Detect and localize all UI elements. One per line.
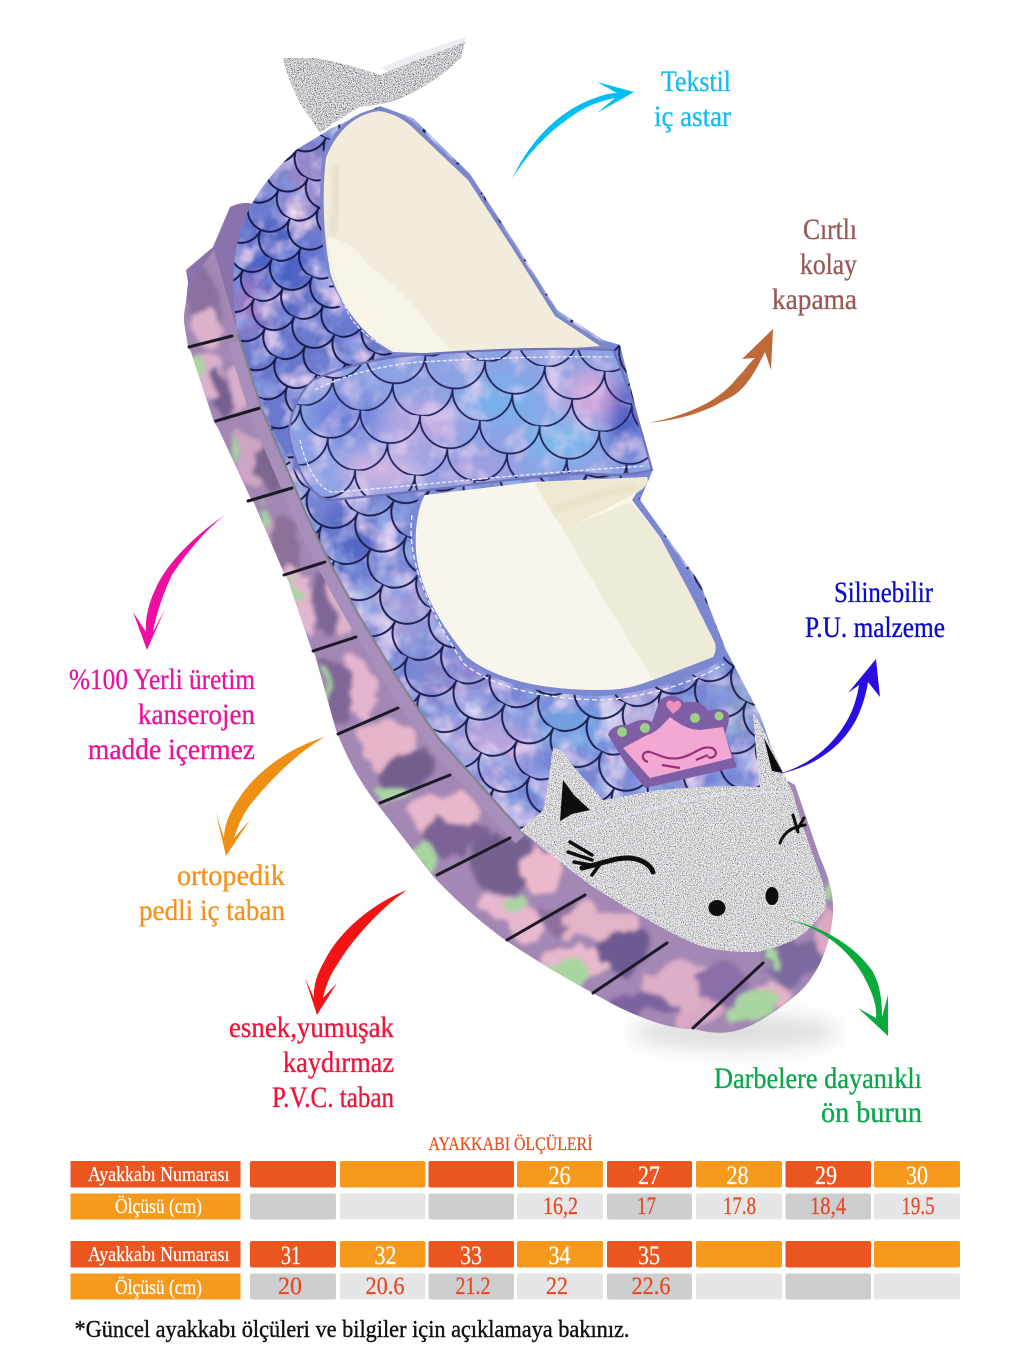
upper seam line: [238, 335, 525, 835]
measure row 1: 18,4: [810, 1193, 846, 1220]
shoe photograph: [170, 35, 850, 1050]
size row 2: 31: [281, 1241, 301, 1270]
sole grooves: [189, 336, 763, 1028]
label: Cırtlı: [772, 213, 857, 316]
arrow: strap closure: [648, 329, 773, 423]
size row 1: 27: [638, 1161, 660, 1190]
glitter cat face: [515, 710, 830, 955]
cat nose dots: [708, 887, 778, 916]
arrow: toe cap: [785, 919, 888, 1036]
label: esnek: esnek,yumuşak: [229, 1011, 394, 1044]
label: Cırtlı: kolay: [800, 248, 857, 281]
measure row 2: 20: [278, 1273, 302, 1300]
row labels: Ölçüsü (cm): [115, 1275, 202, 1299]
label: esnek: P.V.C. taban: [272, 1081, 394, 1114]
size table: [70, 1134, 960, 1300]
measure row 1: 19.5: [902, 1193, 934, 1220]
label: yerli üretim: [69, 663, 255, 766]
lining fold: [535, 477, 648, 530]
label: esnek: kaydırmaz: [283, 1046, 394, 1079]
size row 1: 28: [726, 1161, 748, 1190]
textile lining, heel opening: [320, 108, 620, 362]
measure row 2: 22.6: [632, 1273, 670, 1300]
silver tail fin: [283, 37, 466, 132]
hook and loop strap: [288, 348, 654, 501]
size row 1: 29: [815, 1161, 837, 1190]
label: Tekstil: iç astar: [654, 100, 731, 133]
green splashes: [188, 351, 834, 1029]
arrow: textile lining: [512, 82, 634, 179]
cat eyes: [568, 815, 805, 875]
label: Cırtlı: kapama: [772, 283, 857, 316]
size row 2: 32: [374, 1241, 396, 1270]
label: Silinebilir: P.U. malzeme: [805, 611, 945, 644]
cat ears: [560, 738, 783, 821]
label: esnek: [229, 1011, 394, 1114]
ground shadow: [630, 1014, 840, 1050]
row labels: [70, 1161, 240, 1300]
size row 2: 34: [548, 1241, 570, 1270]
label: yerli üretim: madde içermez: [88, 733, 255, 766]
measure row 1: 17.8: [723, 1193, 756, 1220]
pink crown: [608, 696, 737, 788]
footnote: *Güncel ayakkabı ölçüleri ve bilgiler için açıklamaya bakınız.: [74, 1317, 630, 1343]
label: darbelere: [714, 1062, 922, 1129]
insole: [416, 477, 716, 690]
label: Cırtlı: Cırtlı: [803, 213, 857, 246]
row labels: Ölçüsü (cm): [115, 1194, 202, 1218]
arrow: sole: [305, 890, 407, 1015]
measure row 2: 20.6: [366, 1273, 404, 1300]
measure row 1: 16,2: [543, 1193, 578, 1220]
label: yerli üretim: kanserojen: [138, 698, 255, 731]
stitch: [411, 515, 724, 700]
inner sole rim: [240, 340, 525, 835]
label: Tekstil: Tekstil: [661, 65, 731, 98]
arrow: orthopedic insole: [216, 737, 325, 856]
size row 2: [250, 1241, 960, 1270]
label: ortopedik: [139, 859, 285, 927]
measure row 1: [250, 1193, 960, 1220]
size row 1: 30: [906, 1161, 928, 1190]
arrow: PU material: [778, 659, 880, 774]
label: yerli üretim: %100 Yerli üretim: [69, 663, 255, 696]
label: darbelere: Darbelere dayanıklı: [714, 1062, 922, 1095]
label: Silinebilir: [805, 576, 945, 644]
textile lining, front opening: [411, 477, 725, 700]
label: ortopedik: ortopedik: [177, 859, 285, 892]
heel tab: [184, 203, 254, 340]
label: ortopedik: pedli iç taban: [139, 894, 285, 927]
measure row 2: 22: [546, 1273, 568, 1300]
size row 1: 26: [548, 1161, 570, 1190]
size row 2: 33: [460, 1241, 482, 1270]
arrow: local production: [133, 515, 225, 650]
measure row 1: 17: [637, 1193, 656, 1220]
row labels: Ayakkabı Numarası: [88, 1162, 230, 1186]
mottled sole: [184, 250, 834, 1033]
row labels: Ayakkabı Numarası: [88, 1242, 230, 1266]
side wall textile: [563, 502, 716, 680]
stitched seam: [575, 792, 790, 830]
measure row 2: 21.2: [456, 1273, 490, 1300]
label: Silinebilir: Silinebilir: [834, 576, 933, 609]
label: darbelere: ön burun: [821, 1096, 922, 1129]
size row 2: 35: [638, 1241, 660, 1270]
size row 1: [250, 1161, 960, 1190]
measure row 2: [250, 1273, 960, 1300]
table title: AYAKKABI ÖLÇÜLERİ: [428, 1134, 592, 1155]
mermaid scale upper: [233, 106, 772, 836]
label: Tekstil: [654, 65, 731, 133]
